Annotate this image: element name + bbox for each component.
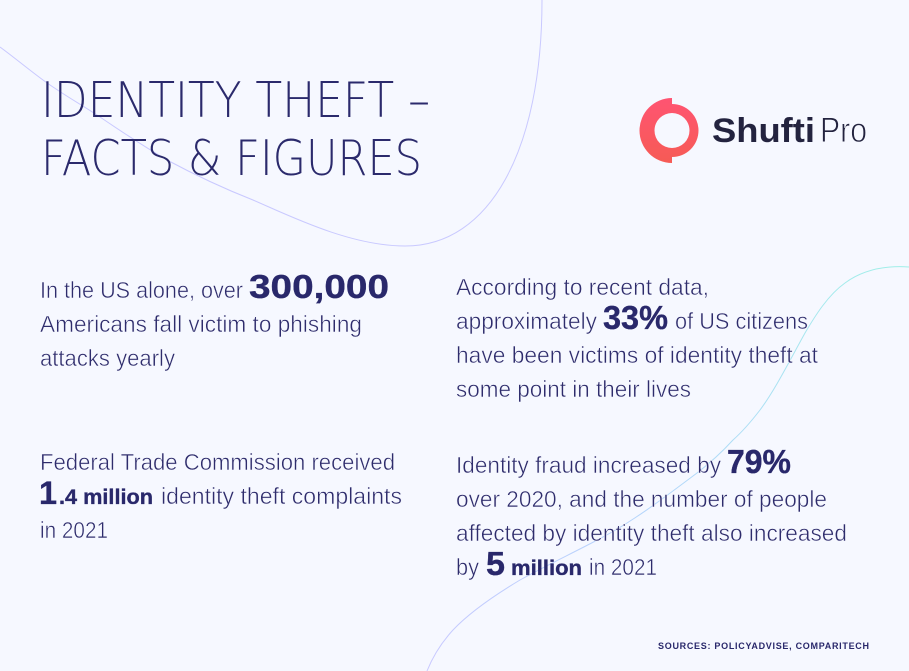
curve: top purple line <box>0 0 542 246</box>
fact: identity fraud: Identity fraud increased by <box>456 452 721 478</box>
icon: ring <box>640 98 698 163</box>
fact: phishing: attacks yearly <box>40 345 175 371</box>
logo: Shufti Pro <box>640 98 867 163</box>
fact: FTC complaints: in 2021 <box>40 517 108 543</box>
fact: FTC complaints: Federal Trade Commission received <box>40 449 395 475</box>
fact: identity fraud: 5 <box>486 545 505 582</box>
title <box>41 72 430 187</box>
sources note: SOURCES: POLICYADVISE, COMPARITECH <box>658 641 869 651</box>
curve: teal to purple line <box>427 267 909 671</box>
fact: phishing: Americans fall victim to phishing <box>40 311 362 337</box>
fact: FTC complaints: 1 <box>39 475 57 511</box>
fact: identity fraud: million <box>511 557 582 580</box>
logo wordmark: Pro <box>820 111 867 150</box>
logo wordmark <box>712 111 867 150</box>
title: IDENTITY THEFT – <box>41 72 430 129</box>
logo wordmark: Shufti <box>712 112 815 150</box>
fact: FTC complaints <box>39 449 402 543</box>
fact: 33 percent: of US citizens <box>675 308 808 334</box>
fact: 33 percent: some point in their lives <box>456 376 691 402</box>
fact: identity fraud: affected by identity theft also increased <box>456 520 847 546</box>
fact: 33 percent: have been victims of identity theft at <box>456 342 819 368</box>
fact: identity fraud: over 2020, and the number of people <box>456 486 827 512</box>
fact: identity fraud: 79% <box>727 443 791 480</box>
fact: identity fraud: by <box>456 554 479 580</box>
fact: 33 percent: 33% <box>603 299 668 336</box>
fact: 33 percent: According to recent data, <box>456 274 709 300</box>
title: FACTS & FIGURES <box>41 130 422 187</box>
fact: identity fraud: in 2021 <box>589 554 657 580</box>
fact: 33 percent: approximately <box>456 308 597 334</box>
fact: phishing <box>40 268 389 371</box>
fact: phishing: In the US alone, over <box>40 277 243 303</box>
fact: phishing: 300,000 <box>249 268 389 305</box>
fact: FTC complaints: identity theft complaints <box>161 483 402 509</box>
fact: identity fraud <box>456 443 847 582</box>
fact: FTC complaints: .4 million <box>59 486 153 509</box>
fact: 33 percent <box>456 274 819 402</box>
